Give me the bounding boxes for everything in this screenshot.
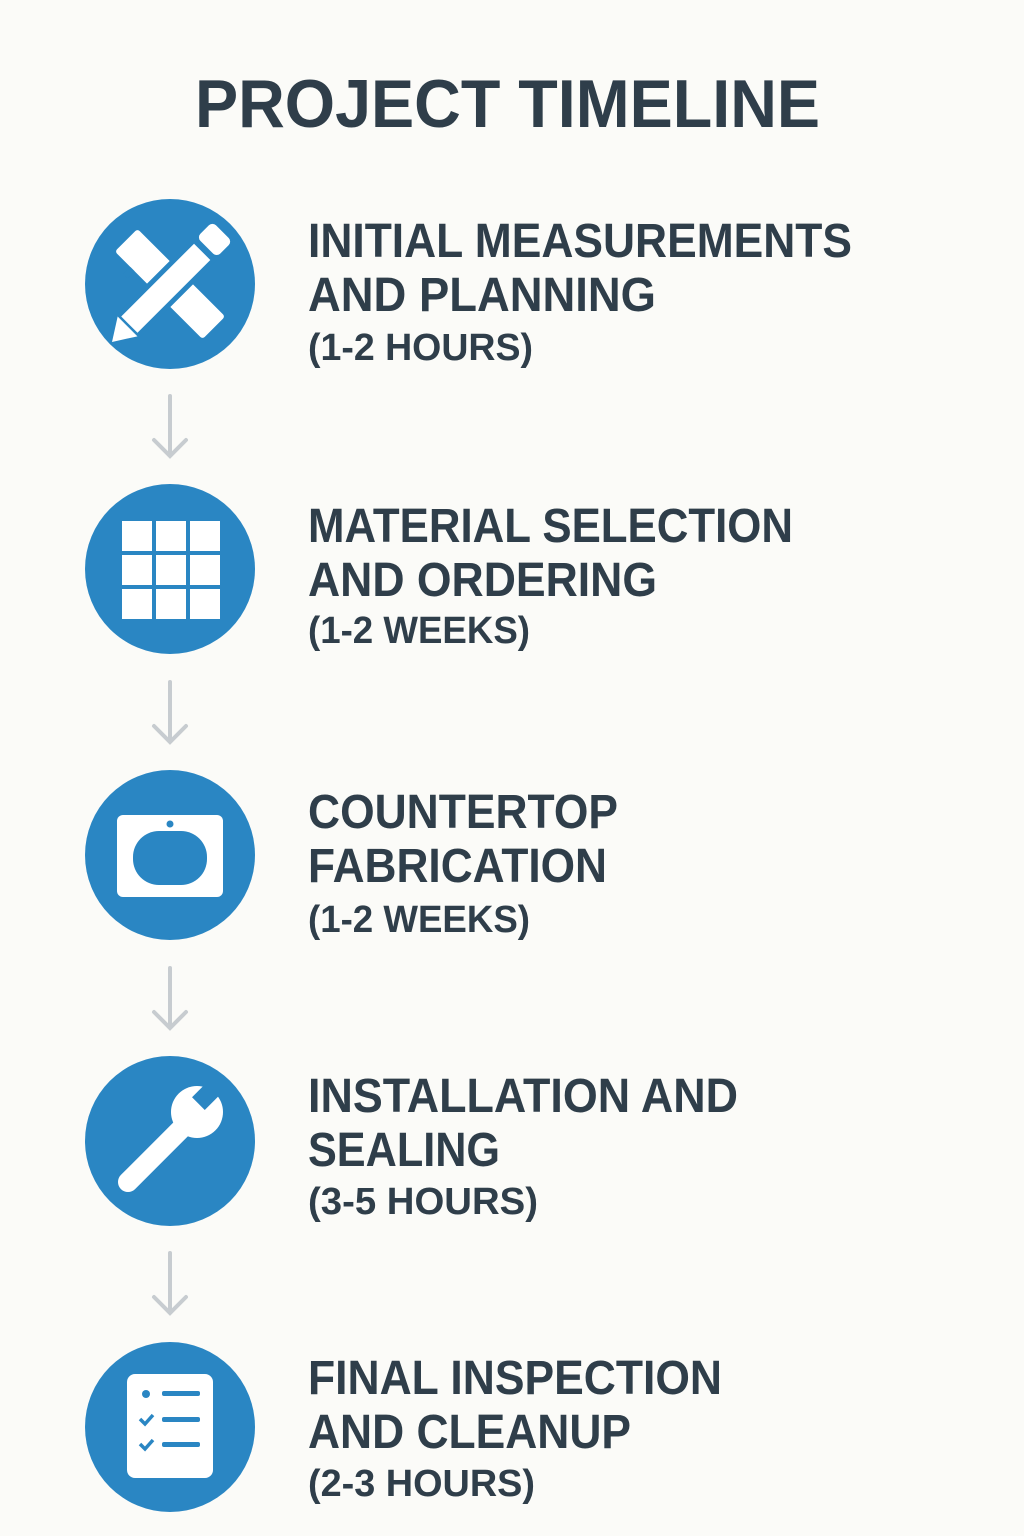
step 4: installation: SEALING [308,1124,500,1177]
arrow [154,396,186,456]
arrow [154,1253,186,1313]
step 2: material selection: AND ORDERING [308,554,657,607]
icon: tile grid [85,484,255,654]
duration: (2-3 HOURS) [308,1463,535,1505]
step 5: final inspection: AND CLEANUP [308,1406,631,1459]
icon: ruler and pencil [85,199,255,369]
step 1: initial measurements [85,199,852,369]
heading: COUNTERTOP [308,786,618,839]
arrow [154,968,186,1028]
step 1: initial measurements: AND PLANNING [308,269,656,322]
step 3: countertop fabrication [85,770,618,941]
icon: wrench [85,1056,255,1226]
icon: sink countertop [85,770,255,940]
heading: MATERIAL SELECTION [308,500,793,553]
step 4: installation [85,1056,738,1226]
step 5: final inspection [85,1342,722,1512]
step 3: countertop fabrication: FABRICATION [308,840,607,893]
duration: (1-2 WEEKS) [308,610,530,652]
arrow [154,682,186,742]
title: PROJECT TIMELINE [195,66,820,142]
heading: INSTALLATION AND [308,1070,738,1123]
heading: INITIAL MEASUREMENTS [308,215,852,268]
icon: checklist [85,1342,255,1512]
duration: (3-5 HOURS) [308,1181,538,1223]
duration: (1-2 HOURS) [308,327,533,369]
step 2: material selection [85,484,793,654]
duration: (1-2 WEEKS) [308,899,530,941]
heading: FINAL INSPECTION [308,1352,722,1405]
